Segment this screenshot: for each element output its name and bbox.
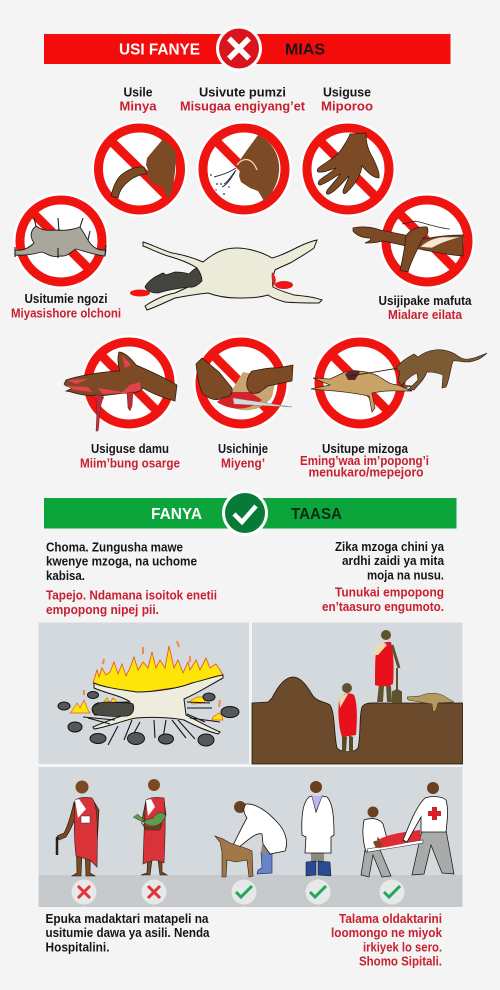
text: burn instructions: kabisa. xyxy=(46,569,85,583)
icon: do not discard carcass xyxy=(311,335,487,431)
hide on the ground xyxy=(83,675,223,745)
label: usitupe mizoga xyxy=(300,442,429,480)
icon: right marker two xyxy=(306,880,330,904)
man in pit xyxy=(338,683,357,752)
icon: wrong marker one xyxy=(72,880,96,904)
label: usijipake mafuta xyxy=(378,294,472,322)
rocks xyxy=(58,692,239,746)
figure: doctor xyxy=(302,781,334,876)
label: usile: Minya xyxy=(120,100,158,114)
banner: fanya: FANYA xyxy=(151,506,202,523)
text: bury instructions: Zika mzoga chini ya xyxy=(335,540,445,554)
text: maasai advice: loomongo ne miyok xyxy=(331,926,442,940)
text: bury instructions: ardhi zaidi ya mita xyxy=(342,554,445,568)
man with spade xyxy=(374,630,401,702)
panel: burning carcass xyxy=(38,622,249,764)
text: avoid fake doctors: Epuka madaktari matapeli na xyxy=(46,912,209,926)
panel: people xyxy=(38,767,462,907)
text: burn instructions xyxy=(46,541,217,617)
text: burn instructions: Choma. Zungusha mawe xyxy=(46,541,183,555)
text: burn instructions: empopong nipej pii. xyxy=(46,603,159,617)
text: bury instructions xyxy=(322,540,445,614)
banner: fanya xyxy=(44,490,456,536)
figure: fake vet with syringe xyxy=(57,780,99,876)
label: usichinje: Usichinje xyxy=(218,442,268,456)
illustration: dead sheep xyxy=(130,240,322,310)
label: usiguse damu xyxy=(80,442,180,471)
label: usichinje: Miyeng’ xyxy=(221,457,265,471)
label: usitupe mizoga: Eming’waa im’popong’i xyxy=(300,454,429,468)
label: usijipake mafuta: Mialare eilata xyxy=(388,308,463,322)
text: burn instructions: Tapejo. Ndamana isoitok enetii xyxy=(46,588,217,602)
label: usitumie ngozi: Usitumie ngozi xyxy=(24,292,108,306)
icon: do not use the hide xyxy=(13,193,109,289)
label: usiguse: Miporoo xyxy=(321,100,373,114)
text: bury instructions: en’taasuro engumoto. xyxy=(322,600,444,614)
label: usitumie ngozi: Miyasishore olchoni xyxy=(11,307,121,321)
figure: stretcher bearers and patient xyxy=(361,782,454,877)
label: usitupe mizoga: menukaro/mepejoro xyxy=(308,466,424,480)
icon: right marker three xyxy=(380,880,404,904)
icon: do not slaughter xyxy=(193,335,293,431)
label: usile xyxy=(120,86,158,114)
label: usiguse: Usiguse xyxy=(323,86,371,100)
flames xyxy=(70,641,223,720)
icon: do not breathe xyxy=(196,121,292,217)
label: usiguse xyxy=(321,86,373,114)
icon: do not eat xyxy=(92,121,188,217)
text: avoid fake doctors: Hospitalini. xyxy=(46,940,110,954)
label: usivute pumzi: Misugaa engiyang’et xyxy=(180,100,306,114)
text: avoid fake doctors: usitumie dawa ya asili. Nenda xyxy=(46,926,210,940)
label: usivute pumzi xyxy=(180,86,306,114)
icon: right marker one xyxy=(232,880,256,904)
icon: do not touch blood xyxy=(64,335,177,431)
text: maasai advice: Shomo Sipitali. xyxy=(359,954,442,968)
panel: burying carcass xyxy=(252,622,462,764)
label: usile: Usile xyxy=(124,86,153,100)
label: usitupe mizoga: Usitupe mizoga xyxy=(322,442,409,456)
label: usivute pumzi: Usivute pumzi xyxy=(199,86,286,100)
figure: traditional healer with herbs xyxy=(133,779,167,875)
label: usijipake mafuta: Usijipake mafuta xyxy=(378,294,472,308)
text: burn instructions: kwenye mzoga, na uchome xyxy=(46,555,197,569)
text: bury instructions: Tunukai empopong xyxy=(335,586,444,600)
banner: usi fanye: MIAS xyxy=(285,42,325,58)
icon: do not touch xyxy=(300,121,396,217)
label: usiguse damu: Usiguse damu xyxy=(91,442,169,456)
text: maasai advice xyxy=(331,912,442,968)
banner: usi fanye xyxy=(44,26,450,72)
label: usitumie ngozi xyxy=(11,292,121,321)
icon: do not apply fat xyxy=(353,193,475,289)
icon: wrong marker two xyxy=(142,880,166,904)
text: bury instructions: moja na nusu. xyxy=(367,568,444,582)
label: usiguse damu: Miim’bung osarge xyxy=(80,457,180,471)
figure: veterinarian and dog xyxy=(215,801,287,877)
banner: usi fanye: USI FANYE xyxy=(119,42,200,58)
text: maasai advice: irkiyek lo sero. xyxy=(363,940,442,954)
text: avoid fake doctors xyxy=(46,912,210,954)
label: usichinje xyxy=(218,442,268,471)
dead animal xyxy=(407,693,454,712)
ground and pit xyxy=(252,677,462,764)
text: maasai advice: Talama oldaktarini xyxy=(339,912,442,926)
banner: fanya: TAASA xyxy=(291,506,342,523)
